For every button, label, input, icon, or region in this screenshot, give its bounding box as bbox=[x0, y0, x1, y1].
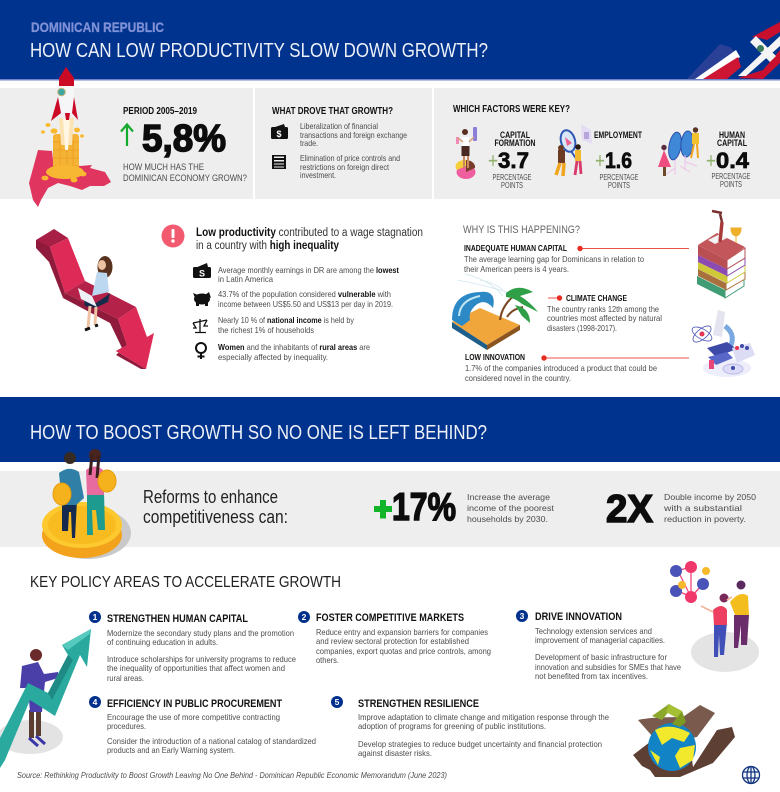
unit: PERCENTAGE bbox=[600, 173, 638, 182]
text: poorest households: income of the poorest bbox=[467, 503, 555, 513]
factor: capital formation bbox=[455, 127, 536, 190]
cause: low innovation: LOW INNOVATION bbox=[465, 352, 525, 362]
text: double income: with a substantial bbox=[663, 503, 742, 513]
cause: low innovation bbox=[465, 352, 689, 383]
unit: PERCENTAGE bbox=[492, 173, 532, 182]
stat: 2X: 2X bbox=[606, 488, 653, 531]
unit bbox=[712, 172, 750, 189]
factor: human capital bbox=[658, 127, 750, 189]
unit: POINTS bbox=[608, 181, 630, 190]
policy 1: human capital: Modernize the secondary study plans and the promotion bbox=[107, 628, 294, 638]
text: double income: reduction in poverty. bbox=[664, 514, 746, 524]
value bbox=[706, 148, 750, 173]
illustration: hurricane beach bbox=[452, 274, 538, 350]
text: reforms bbox=[143, 487, 288, 527]
cause: climate change: CLIMATE CHANGE bbox=[566, 293, 627, 303]
text: income share: Nearly 10 % of national income is held by bbox=[218, 315, 355, 325]
label: HUMAN bbox=[719, 130, 745, 141]
illustration: network and two people bbox=[670, 561, 759, 672]
label: FORMATION bbox=[494, 138, 536, 149]
cause: climate change bbox=[547, 293, 662, 333]
policy 4: public procurement: 4 bbox=[93, 697, 98, 707]
value: 1.6 bbox=[605, 148, 632, 173]
unit bbox=[492, 173, 532, 190]
text: vulnerable: income between US$5.50 and US$13 per day in 2019. bbox=[218, 299, 393, 309]
policy 1: human capital: the inequality of opportunities that affect women and bbox=[107, 663, 285, 673]
text: earnings: Average monthly earnings in DR are among the lowest bbox=[218, 265, 399, 275]
text: women: Women and the inhabitants of rural areas are bbox=[218, 342, 370, 352]
cause: climate change: The country ranks 12th among the bbox=[547, 304, 659, 314]
cause: low innovation: 1.7% of the companies introduced a product that could be bbox=[465, 363, 657, 373]
value: 0.4 bbox=[716, 148, 750, 173]
heading: WHICH FACTORS WERE KEY? bbox=[453, 103, 570, 115]
icon: wallet bbox=[193, 263, 211, 278]
text: reforms: competitiveness can: bbox=[143, 507, 288, 527]
policy 3: drive innovation: improvement of managerial capacities. bbox=[535, 635, 665, 645]
icon: green up arrow bbox=[121, 124, 133, 146]
policy 2: competitive markets: FOSTER COMPETITIVE MARKETS bbox=[316, 612, 464, 624]
label: CAPITAL bbox=[500, 130, 530, 141]
unit: PERCENTAGE bbox=[712, 172, 750, 181]
illustration: stack of books bbox=[697, 211, 745, 298]
icon: wallet: S bbox=[199, 268, 205, 278]
policy 3: drive innovation: innovation and subsidies for SMEs that have bbox=[535, 662, 681, 672]
unit bbox=[600, 173, 638, 190]
text: growth caption: HOW MUCH HAS THE bbox=[123, 162, 204, 173]
illustration: magnifier team bbox=[556, 124, 592, 176]
text: liberalization: Liberalization of financial bbox=[300, 121, 378, 131]
icon: abacus bbox=[272, 155, 286, 169]
text: income share: the richest 1% of households bbox=[218, 325, 314, 335]
policy 5: resilience: STRENGTHEN RESILIENCE bbox=[358, 698, 479, 710]
policy 5: resilience: 5 bbox=[335, 697, 340, 707]
policy 2: competitive markets bbox=[298, 611, 491, 665]
illustration: rocket over map bbox=[29, 67, 111, 207]
heading: WHAT DROVE THAT GROWTH? bbox=[272, 105, 393, 117]
main title: HOW CAN LOW PRODUCTIVITY SLOW DOWN GROWTH? bbox=[30, 39, 488, 62]
policy 5: resilience: adoption of programs for greening of public institutions. bbox=[358, 721, 546, 731]
policy 3: drive innovation: Development of basic infrastructure for bbox=[535, 652, 667, 662]
unit: POINTS bbox=[720, 180, 742, 189]
text: vulnerable: 43.7% of the population considered vulnerable with bbox=[218, 289, 391, 299]
text: women bbox=[218, 342, 370, 362]
cause: climate change: disasters (1998-2017). bbox=[547, 323, 617, 333]
policy 4: public procurement: products and an Early Warning system. bbox=[107, 745, 235, 755]
illustration: microscope and atom bbox=[690, 310, 755, 377]
illustration: couple on coin bbox=[42, 449, 131, 559]
illustration: woman with rising arrow bbox=[0, 629, 91, 768]
text: earnings bbox=[218, 265, 399, 284]
cause: inadequate human capital bbox=[464, 243, 689, 274]
cause: inadequate human capital: The average learning gap for Dominicans in relation to bbox=[464, 254, 644, 264]
unit: POINTS bbox=[501, 181, 523, 190]
policy 4: public procurement: EFFICIENCY IN PUBLIC PROCUREMENT bbox=[107, 698, 282, 710]
icon: World Bank globe bbox=[742, 766, 760, 784]
policy 3: drive innovation: Technology extension services and bbox=[535, 626, 652, 636]
icon: scales bbox=[193, 319, 208, 332]
icon: flag ribbon bbox=[687, 22, 780, 79]
illustration: circuit brain bbox=[658, 127, 699, 176]
text: liberalization: transactions and foreign exchange bbox=[300, 130, 407, 140]
label bbox=[494, 130, 536, 149]
icon: female symbol bbox=[196, 343, 206, 359]
policy 1: human capital: STRENGTHEN HUMAN CAPITAL bbox=[107, 613, 248, 625]
label: EMPLOYMENT bbox=[594, 130, 642, 141]
text: double income bbox=[663, 492, 756, 524]
value: 3.7 bbox=[498, 148, 529, 173]
text: elimination: Elimination of price controls and bbox=[300, 153, 400, 163]
text: earnings: in Latin America bbox=[218, 274, 273, 284]
text: poorest households: households by 2030. bbox=[467, 514, 548, 524]
policy 3: drive innovation bbox=[516, 610, 681, 681]
header banner bbox=[0, 0, 780, 80]
label: CAPITAL bbox=[717, 138, 747, 149]
cause: climate change: countries most affected by natural bbox=[547, 313, 662, 323]
cause: low innovation: considered novel in the country. bbox=[465, 373, 571, 383]
icon: warning bbox=[162, 224, 184, 248]
source note: Source: Rethinking Productivity to Boost Growth Leaving No One Behind - Dominican Republic Economic Memorandum (June 2023) bbox=[17, 770, 447, 780]
text: double income: Double income by 2050 bbox=[664, 492, 756, 502]
policy 2: competitive markets: Reduce entry and expansion barriers for companies bbox=[316, 627, 488, 637]
section banner: how to boost growth: HOW TO BOOST GROWTH SO NO ONE IS LEFT BEHIND? bbox=[30, 421, 487, 444]
factor: employment bbox=[556, 124, 642, 190]
stat: growth rate: 5,8% bbox=[142, 118, 226, 160]
text: vulnerable bbox=[218, 289, 393, 309]
icon: cash bbox=[271, 124, 288, 139]
stat: +17%: 17% bbox=[392, 486, 456, 529]
text: elimination: investment. bbox=[300, 170, 336, 180]
policy 2: competitive markets: and review sectoral protection for established bbox=[316, 636, 469, 646]
policy 1: human capital: 1 bbox=[93, 612, 98, 622]
policy 4: public procurement bbox=[89, 696, 316, 755]
text: poorest households bbox=[467, 492, 555, 524]
icon: cash: $ bbox=[276, 129, 282, 139]
stat: +17% bbox=[374, 486, 456, 529]
policy 4: public procurement: Consider the introduction of a national catalog of standardized bbox=[107, 736, 316, 746]
panel: what drove growth bbox=[255, 88, 432, 199]
illustration: falling arrow with woman bbox=[36, 229, 154, 369]
policy 1: human capital: of continuing education in adults. bbox=[107, 637, 218, 647]
policy 3: drive innovation: not benefited from tax incentives. bbox=[535, 671, 648, 681]
policy 2: competitive markets: companies, export quotas and price controls, among bbox=[316, 646, 491, 656]
value: + bbox=[706, 148, 716, 173]
text: growth caption bbox=[123, 162, 247, 184]
cause: inadequate human capital: their American peers is 4 years. bbox=[464, 264, 569, 274]
policy 2: competitive markets: 2 bbox=[302, 612, 307, 622]
label bbox=[717, 130, 747, 149]
text: period: PERIOD 2005–2019 bbox=[123, 105, 197, 117]
text: elimination: restrictions on foreign direct bbox=[300, 162, 390, 172]
heading: key policy areas: KEY POLICY AREAS TO ACCELERATE GROWTH bbox=[30, 574, 341, 591]
policy 1: human capital: rural areas. bbox=[107, 673, 144, 683]
heading: why is this happening: WHY IS THIS HAPPENING? bbox=[463, 224, 580, 236]
panel: reforms bbox=[0, 449, 780, 559]
policy 5: resilience: against disaster risks. bbox=[358, 748, 432, 758]
text: high inequality statement: in a country with high inequality bbox=[196, 240, 340, 252]
text: poorest households: Increase the average bbox=[467, 492, 550, 502]
policy 3: drive innovation: DRIVE INNOVATION bbox=[535, 611, 622, 623]
illustration: woman on pie chart bbox=[455, 127, 477, 179]
text: reforms: Reforms to enhance bbox=[143, 487, 278, 507]
policy 5: resilience: Improve adaptation to climate change and mitigation response through the bbox=[358, 712, 609, 722]
policy 1: human capital: Introduce scholarships for university programs to reduce bbox=[107, 654, 296, 664]
text: women: especially affected by inequality. bbox=[218, 352, 328, 362]
cause: inadequate human capital: INADEQUATE HUMAN CAPITAL bbox=[464, 243, 567, 253]
illustration: hands holding globe bbox=[633, 704, 735, 777]
policy 5: resilience bbox=[331, 696, 609, 758]
value bbox=[595, 148, 632, 173]
section banner: how to boost growth bbox=[0, 397, 780, 462]
icon: piggy bank bbox=[193, 292, 211, 306]
text: elimination bbox=[300, 153, 400, 180]
policy 1: human capital bbox=[89, 611, 296, 683]
policy 4: public procurement: procedures. bbox=[107, 721, 146, 731]
country label: DOMINICAN REPUBLIC bbox=[31, 19, 164, 35]
value: + bbox=[595, 148, 605, 173]
text: income share bbox=[218, 315, 355, 335]
policy 5: resilience: Develop strategies to reduce budget uncertainty and financial protection bbox=[358, 739, 602, 749]
policy 2: competitive markets: others. bbox=[316, 655, 339, 665]
text: growth caption: DOMINICAN ECONOMY GROWN? bbox=[123, 173, 247, 184]
policy 4: public procurement: Encourage the use of more competitive contracting bbox=[107, 712, 280, 722]
text: liberalization: trade. bbox=[300, 138, 318, 148]
text: low productivity statement: Low productivity contributed to a wage stagnation bbox=[196, 227, 423, 239]
policy 3: drive innovation: 3 bbox=[520, 611, 525, 621]
value: + bbox=[488, 148, 498, 173]
panel: key factors bbox=[434, 88, 780, 199]
text: liberalization bbox=[300, 121, 407, 148]
panel: growth bbox=[0, 67, 253, 207]
